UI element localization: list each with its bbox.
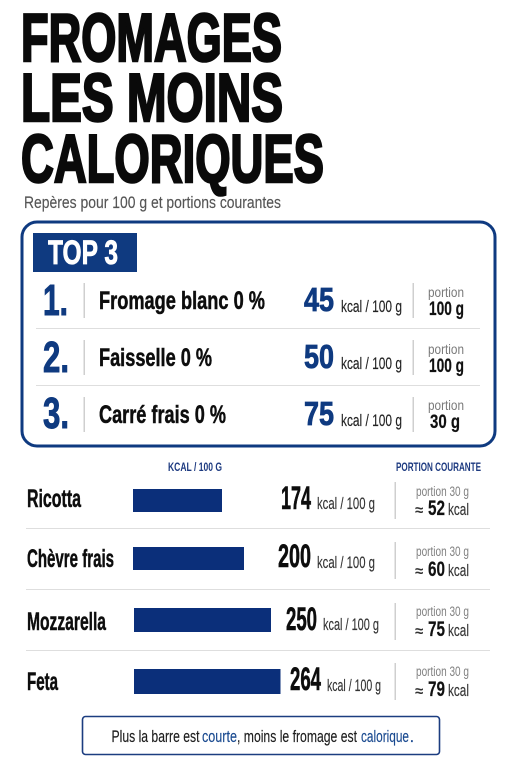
row: fromage blanc: portion (428, 284, 464, 300)
row: faisselle: 50 (304, 338, 334, 375)
top 3 badge: TOP 3 (48, 234, 118, 272)
row: feta (27, 661, 469, 701)
row: fromage blanc: 100 g (429, 299, 464, 320)
row: feta: kcal / 100 g (327, 676, 381, 695)
row: feta: ≈ (415, 683, 423, 700)
row: ricotta: Ricotta (27, 485, 82, 513)
row: feta: 264 (290, 661, 321, 697)
row: mozzarella (27, 601, 469, 641)
row: ricotta: 174 (281, 480, 311, 516)
row: carré frais: 30 g (430, 412, 460, 433)
row: mozzarella: 75 (428, 618, 445, 641)
row: feta: 79 (428, 678, 445, 701)
panel: top 3 (22, 222, 495, 446)
row: ricotta: 52 (428, 497, 445, 520)
row: fromage blanc: Fromage blanc 0 % (99, 287, 265, 315)
row: fromage blanc (43, 276, 464, 325)
subtitle: Repères pour 100 g et portions courantes (24, 193, 281, 212)
row: ricotta (27, 480, 469, 520)
column header: kcal: KCAL / 100 G (168, 460, 222, 474)
row: faisselle: 2. (43, 333, 69, 382)
bar chart (27, 480, 469, 701)
title: CALORIQUES (21, 121, 324, 197)
row: faisselle: Faisselle 0 % (99, 344, 212, 372)
row: mozzarella: 250 (286, 601, 317, 637)
row: carré frais: 75 (304, 395, 334, 432)
row: carré frais: 3. (43, 389, 69, 438)
title: LES MOINS (21, 60, 283, 136)
row: fromage blanc: kcal / 100 g (341, 297, 402, 316)
row: feta: Feta (27, 668, 59, 696)
row: feta: kcal (448, 681, 469, 700)
row: carré frais: portion (428, 397, 464, 413)
row: mozzarella: kcal / 100 g (323, 615, 379, 634)
row: chèvre frais: Chèvre frais (27, 545, 114, 573)
callout: Plus la barre est (112, 727, 200, 746)
row: mozzarella: Mozzarella (27, 608, 107, 636)
row: faisselle: kcal / 100 g (341, 354, 402, 373)
row: chèvre frais: kcal / 100 g (317, 553, 375, 572)
row: fromage blanc: 1. (43, 276, 68, 325)
row: carré frais: kcal / 100 g (341, 411, 402, 430)
row: faisselle: 100 g (429, 356, 464, 377)
row: chèvre frais: kcal (448, 561, 469, 580)
row: mozzarella: portion 30 g (416, 604, 469, 619)
callout: courte (202, 727, 237, 746)
callout (82, 716, 440, 754)
row: chèvre frais (27, 538, 469, 581)
row: mozzarella: kcal (448, 621, 469, 640)
row: ricotta: kcal / 100 g (317, 494, 375, 513)
row: mozzarella: ≈ (415, 623, 423, 640)
callout: , moins le fromage est (237, 727, 357, 746)
title (21, 0, 324, 197)
row: chèvre frais: 200 (278, 538, 311, 574)
row: faisselle: portion (428, 341, 464, 357)
row: chèvre frais: ≈ (415, 563, 423, 580)
row: ricotta: ≈ (415, 502, 423, 519)
row: carré frais: Carré frais 0 % (99, 401, 226, 429)
row: chèvre frais: portion 30 g (416, 544, 469, 559)
row: feta: portion 30 g (416, 664, 469, 679)
title: FROMAGES (21, 0, 282, 76)
row: carré frais (43, 389, 464, 438)
callout: calorique (361, 727, 409, 746)
row: ricotta: kcal (448, 500, 469, 519)
callout: . (410, 727, 414, 746)
row: ricotta: portion 30 g (416, 484, 469, 499)
row: faisselle (43, 333, 464, 382)
row: chèvre frais: 60 (428, 558, 445, 581)
row: fromage blanc: 45 (304, 281, 334, 318)
